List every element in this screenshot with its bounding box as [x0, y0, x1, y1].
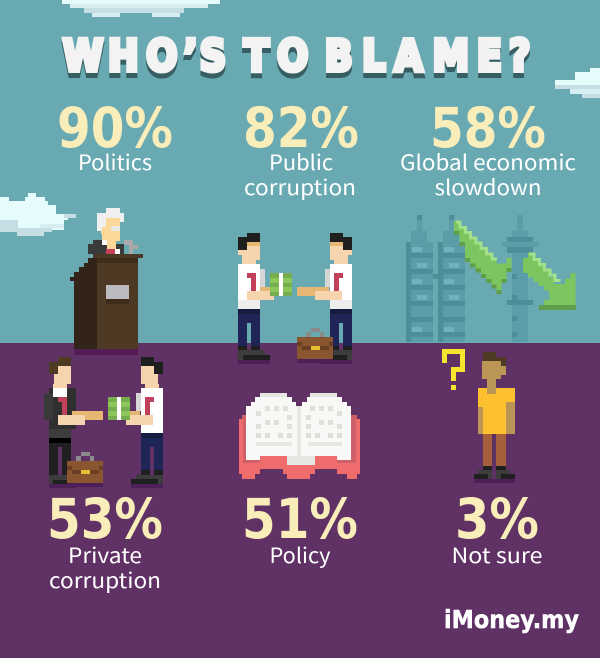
icon: skyline with falling arrows: [406, 215, 576, 342]
podium base: [74, 349, 138, 355]
book pages: [246, 393, 351, 465]
arrow highlights: [456, 222, 560, 280]
icon: question mark: [442, 349, 465, 390]
icon: open book: [239, 393, 360, 479]
politician face: [101, 218, 120, 251]
stat: public corruption 82%: [243, 96, 359, 202]
stat: global economic slowdown 58%: [400, 96, 576, 202]
icon: person in yellow shirt: [474, 352, 515, 483]
politician hair: [97, 208, 124, 231]
stat: private corruption 53%: corruption: [49, 565, 161, 595]
arrow base shadow: [539, 305, 576, 310]
book text dots: [256, 406, 342, 438]
stat: global economic slowdown 58%: Global economic: [400, 147, 576, 177]
stat: policy 51%: [242, 487, 358, 570]
stat: policy 51%: 51%: [242, 487, 358, 551]
microphone: [124, 240, 138, 254]
politician jacket: [88, 240, 124, 254]
stat: not sure 3%: Not sure: [452, 540, 542, 570]
arrow: falling part one: [454, 221, 512, 290]
stat: public corruption 82%: Public: [269, 147, 333, 177]
stat: private corruption 53%: Private: [68, 540, 142, 570]
icon: politician at podium: [70, 208, 143, 355]
podium front: [97, 258, 138, 349]
businessman in dark suit: [44, 357, 103, 488]
book cover: [239, 415, 360, 479]
podium plate: [106, 285, 129, 299]
stat: global economic slowdown 58%: 58%: [430, 96, 546, 160]
logo: iMoney.my: iMoney.my: [444, 605, 579, 634]
cloud: right: [555, 68, 600, 98]
stat: public corruption 82%: 82%: [243, 96, 359, 160]
podium side: [70, 254, 97, 349]
icon: private corruption handshake: [44, 357, 163, 488]
title: WHO’S TO BLAME?: [63, 32, 530, 81]
stat: public corruption 82%: corruption: [244, 172, 356, 202]
politician shirt and tie: [102, 240, 120, 254]
stat: politics 90%: Politics: [78, 147, 152, 177]
icon: public corruption handshake: [238, 233, 352, 364]
cloud: top: [62, 0, 220, 17]
arrow: falling part two: [523, 252, 575, 310]
stat: private corruption 53%: [47, 487, 163, 595]
stat: global economic slowdown 58%: slowdown: [434, 172, 542, 202]
stat: private corruption 53%: 53%: [47, 487, 163, 551]
podium top: [93, 254, 143, 258]
title: WHO’S TO BLAME?: [63, 37, 530, 86]
arrow: falling part one shadow: [454, 225, 512, 294]
sky background: [0, 0, 600, 343]
stat: policy 51%: Policy: [270, 540, 331, 570]
politician moustache: [111, 226, 120, 231]
stat: politics 90%: 90%: [57, 96, 173, 160]
businessman in white shirt: [126, 357, 163, 488]
cloud: left: [0, 193, 76, 236]
stat: not sure 3%: 3%: [455, 487, 539, 551]
ground background: [0, 343, 600, 658]
